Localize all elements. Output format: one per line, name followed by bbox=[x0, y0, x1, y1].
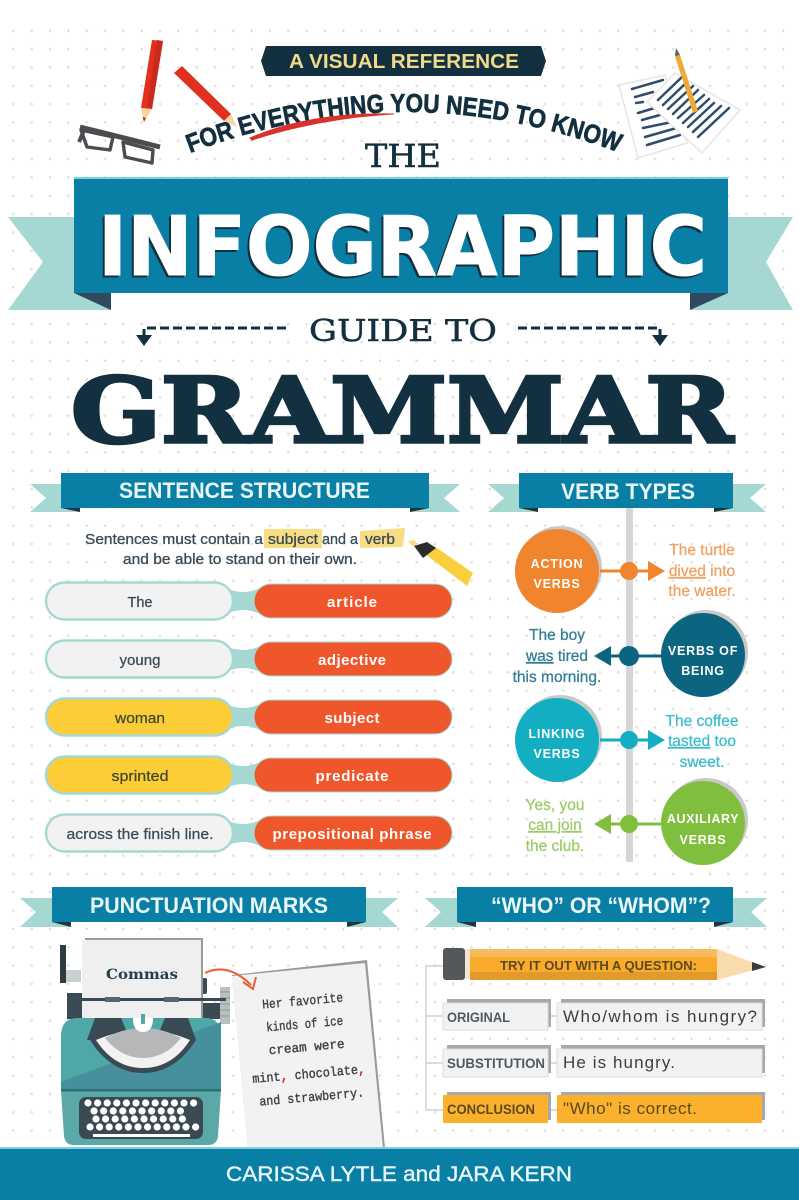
row: sprinted / predicate bbox=[46, 756, 452, 794]
heading: verb types banner bbox=[488, 473, 766, 512]
intro text with highlights: and a bbox=[322, 532, 359, 548]
panel: sentence structure bbox=[30, 473, 473, 852]
timeline spine bbox=[626, 508, 633, 862]
main title banner: INFOGRAPHIC bbox=[98, 200, 707, 295]
icon: upright red pencil bbox=[141, 40, 163, 122]
sheet of paper with comma example: Her favorite bbox=[262, 991, 344, 1013]
verb: action verbs: VERBS bbox=[533, 577, 581, 591]
title words: guide to: GUIDE TO bbox=[309, 314, 497, 349]
tagline: a visual reference: A VISUAL REFERENCE bbox=[289, 51, 519, 73]
verb: auxiliary verbs: can join bbox=[528, 817, 582, 834]
intro text with highlights bbox=[85, 528, 405, 568]
title word: grammar: GRAMMAR bbox=[71, 358, 734, 464]
verb: linking verbs: tasted too bbox=[668, 733, 736, 750]
row: young / adjective: young bbox=[120, 652, 160, 669]
verb: verbs of being: VERBS OF bbox=[668, 644, 738, 658]
intro text with highlights: subject bbox=[268, 532, 318, 548]
icon: highlighter bbox=[408, 540, 473, 586]
sheet of paper with comma example: cream were bbox=[268, 1037, 345, 1058]
heading: punctuation marks banner bbox=[20, 887, 398, 927]
row: young / adjective: adjective bbox=[318, 652, 386, 669]
footer: authors: CARISSA LYTLE and JARA KERN bbox=[226, 1163, 572, 1186]
row: original: Who/whom is hungry? bbox=[563, 1007, 757, 1026]
row: across the finish line / prepositional phrase: across the finish line. bbox=[66, 826, 214, 843]
verb: verbs of being: The boy bbox=[529, 627, 585, 644]
title word: the: THE bbox=[365, 137, 441, 175]
row: the / article: article bbox=[327, 594, 377, 611]
verb: auxiliary verbs: Yes, you bbox=[526, 797, 584, 814]
intro text with highlights: verb bbox=[365, 532, 395, 548]
verb: linking verbs: VERBS bbox=[533, 747, 581, 761]
verb: linking verbs bbox=[515, 695, 738, 782]
verb: action verbs: ACTION bbox=[531, 557, 583, 571]
intro text with highlights: and be able to stand on their own. bbox=[123, 552, 357, 568]
verb: auxiliary verbs: VERBS bbox=[679, 833, 727, 847]
row: woman / subject: woman bbox=[114, 710, 165, 727]
arrow: dashed right bbox=[518, 328, 668, 346]
heading: verb types banner: VERB TYPES bbox=[561, 479, 695, 504]
row: young / adjective bbox=[46, 640, 452, 678]
footer: authors bbox=[0, 1147, 799, 1200]
panel: verb types bbox=[488, 473, 766, 865]
verb: auxiliary verbs bbox=[526, 778, 748, 865]
intro text with highlights: Sentences must contain a bbox=[85, 532, 264, 548]
row: original bbox=[443, 999, 765, 1030]
row: conclusion bbox=[443, 1092, 765, 1123]
verb: verbs of being: BEING bbox=[681, 664, 725, 678]
heading: sentence structure banner: SENTENCE STRUCTURE bbox=[119, 478, 370, 503]
tagline: a visual reference bbox=[261, 46, 546, 76]
row: across the finish line / prepositional phrase: prepositional phrase bbox=[272, 826, 432, 843]
verb: linking verbs: The coffee bbox=[666, 713, 738, 730]
verb: linking verbs: LINKING bbox=[528, 727, 586, 741]
verb: action verbs bbox=[515, 526, 736, 613]
row: the / article: The bbox=[128, 594, 152, 611]
row: the / article bbox=[46, 582, 452, 620]
sheet of paper with comma example: mint, chocolate, bbox=[252, 1062, 366, 1087]
row: conclusion: "Who" is correct. bbox=[563, 1099, 697, 1118]
row: substitution: He is hungry. bbox=[563, 1053, 675, 1072]
curved heading: for everything you need to know: FOR EVERYTHING YOU NEED TO KNOW bbox=[184, 94, 624, 153]
sheet of paper with comma example bbox=[232, 960, 385, 1148]
row: across the finish line / prepositional phrase bbox=[46, 814, 452, 852]
verb: auxiliary verbs: AUXILIARY bbox=[667, 812, 739, 826]
arrow: dashed left bbox=[136, 328, 286, 346]
sheet of paper with comma example: and strawberry. bbox=[259, 1085, 365, 1110]
verb: action verbs: dived into bbox=[669, 563, 735, 580]
main title banner: INFOGRAPHIC bbox=[96, 202, 705, 297]
icon: slanted red pencil bbox=[174, 66, 237, 127]
verb: verbs of being: this morning. bbox=[513, 669, 601, 686]
heading: who or whom banner: “WHO” OR “WHOM”? bbox=[491, 893, 711, 918]
verb: action verbs: the water. bbox=[668, 583, 736, 600]
icon: papers and yellow pencil bbox=[619, 48, 740, 158]
row: sprinted / predicate: sprinted bbox=[112, 768, 168, 785]
heading: who or whom banner bbox=[425, 887, 767, 927]
arrow: curved orange bbox=[205, 969, 256, 989]
panel: who or whom bbox=[425, 887, 767, 1123]
main title banner bbox=[8, 177, 793, 310]
verb: verbs of being bbox=[513, 610, 748, 697]
illustration: typewriter: Commas bbox=[106, 967, 178, 983]
tree connector lines bbox=[426, 966, 557, 1110]
row: substitution: SUBSTITUTION bbox=[447, 1056, 545, 1071]
sheet of paper with comma example: kinds of ice bbox=[266, 1014, 344, 1035]
row: woman / subject: subject bbox=[324, 710, 380, 727]
icon: glasses bbox=[79, 127, 160, 163]
illustration: typewriter bbox=[60, 938, 230, 1145]
row: substitution bbox=[443, 1045, 765, 1077]
heading: punctuation marks banner: PUNCTUATION MARKS bbox=[90, 893, 328, 918]
verb: verbs of being: was tired bbox=[525, 648, 588, 665]
heading: sentence structure banner bbox=[30, 473, 460, 512]
row: sprinted / predicate: predicate bbox=[316, 768, 388, 785]
verb: linking verbs: sweet. bbox=[680, 754, 724, 771]
row: original: ORIGINAL bbox=[447, 1010, 510, 1025]
verb: auxiliary verbs: the club. bbox=[526, 838, 584, 855]
verb: action verbs: The turtle bbox=[669, 542, 735, 559]
row: conclusion: CONCLUSION bbox=[447, 1102, 535, 1117]
row: woman / subject bbox=[46, 698, 452, 736]
pencil: try it out with a question bbox=[443, 948, 766, 980]
pencil: try it out with a question: TRY IT OUT WITH A QUESTION: bbox=[500, 958, 697, 973]
panel: punctuation marks bbox=[20, 887, 398, 1148]
